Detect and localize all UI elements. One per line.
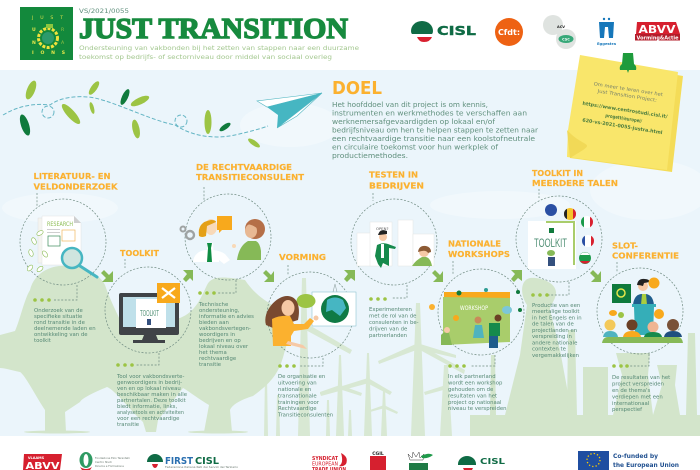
heading: TRANSITIECONSULENT (196, 173, 305, 182)
icon: push pin (620, 53, 636, 73)
description: gehouden om de (448, 387, 493, 393)
panel: step 1 literature and field research (20, 172, 118, 344)
description: deelnemende laden en (34, 326, 96, 332)
icon: consultant woman (237, 219, 265, 260)
description: biedt informatie, links, (117, 404, 177, 410)
dashed flight path (3, 97, 268, 137)
dashed circle (597, 262, 683, 366)
icon: toolkit poster (528, 221, 576, 269)
icon: man in green jacket (375, 230, 396, 268)
icon: audience (602, 319, 683, 343)
text: Doel description: en circulaire toekomst voor hun werkplek of (332, 142, 498, 152)
description: perspectief (612, 407, 642, 413)
description: bieden aan (199, 320, 229, 326)
logo: Fondazione Ezio Tarantelli: Fondazione Ezio Tarantelli (95, 456, 130, 460)
heading: VORMING (279, 253, 326, 262)
text: Doel description: instrumenten en werkmethodes te verschaffen aan (332, 108, 527, 118)
icon: Belgian flag (564, 208, 576, 220)
subtitle: toekomst op bedrijfs- of sectorniveau door middel van sociaal overleg (79, 53, 332, 61)
heading: VELDONDERZOEK (34, 182, 118, 192)
icon: speaker at podium (609, 278, 664, 335)
sticky note text: https://www.centrostudi.cisl.it/ (582, 101, 668, 120)
three dots (531, 293, 549, 297)
dashed circle (516, 189, 602, 295)
description: vergemakkelijken (532, 353, 579, 359)
background clouds (2, 103, 700, 223)
description: De resultaten van het (612, 375, 670, 381)
heading: Doel: DOEL (332, 78, 382, 99)
logo: Vlaams ABVV: VLAAMS (28, 456, 45, 460)
icon: office building (357, 220, 434, 266)
description: ven en op lokaal niveau (117, 386, 181, 392)
heading: LITERATUUR- EN (34, 172, 110, 181)
logo: Just Transition project: R (61, 27, 65, 33)
heading: SLOT- (612, 242, 638, 250)
description: project verspreiden (612, 382, 664, 388)
dashed circle (185, 187, 271, 293)
logo: ACV CSC (543, 15, 576, 49)
description: trainingen voor (278, 400, 320, 406)
logo: Co-funded by the European Union: the European Union (613, 461, 679, 469)
text: Doel description: een rechtvaardige transitie naar een koolstofneutrale (332, 134, 536, 143)
panel: step 2 toolkit (105, 249, 191, 428)
icon: toolkit poster: TOOLKIT (534, 236, 567, 250)
icon: research document with magnifier (26, 216, 97, 277)
logo: ABVV Vorming & Actie: ABVV (638, 24, 676, 36)
description: Experimenteren (369, 307, 412, 313)
description: bedrijven en op (199, 338, 241, 344)
description: informatie en advies (199, 314, 254, 320)
description: meertalige toolkit (532, 309, 580, 315)
sticky note (567, 53, 683, 172)
description: Technische (198, 302, 228, 308)
description: en de thema's (612, 388, 650, 394)
description: uitvoering van (278, 380, 317, 386)
description: contexten te (532, 346, 566, 352)
description: andere nationale (532, 340, 577, 346)
text: Doel description: productiemethodes. (332, 151, 408, 160)
description: rond transitie in de (34, 320, 85, 326)
logo: First CISL (147, 454, 238, 469)
sticky note text: progetti/europei/ (605, 113, 643, 125)
project code: VS/2021/0055 (79, 7, 129, 15)
description: Tool voor vakbondsverte- (116, 374, 184, 380)
heading: WORKSHOPS (448, 250, 510, 259)
background: wind turbines (264, 278, 465, 436)
heading: DE RECHTVAARDIGE (196, 163, 292, 172)
three dots (198, 291, 216, 295)
logo: CGIL (370, 451, 386, 470)
three dots (612, 364, 629, 368)
text: Doel description: Het hoofddoel van dit project is om kennis, (332, 100, 488, 109)
description: analysetools en activiteiten (117, 410, 184, 416)
heading: TOOLKIT IN (532, 169, 583, 178)
text: Doel description: bedrijfsniveau om hen te helpen stappen te zetten naar (332, 126, 538, 134)
heading: NATIONALE (448, 240, 501, 248)
background band (0, 70, 700, 436)
description: de talen van de (532, 322, 574, 328)
heading: MEERDERE TALEN (532, 179, 618, 188)
description: De organisatie en (278, 374, 325, 380)
description: genwoordigers in bedrij- (117, 380, 182, 386)
logo: Just Transition project: JUST (31, 15, 63, 21)
sticky note text: Just Transition Project: (596, 88, 658, 104)
logo: ACV CSC: ACV (557, 25, 565, 29)
description: Rechtvaardige (278, 406, 317, 412)
description: nationale en (278, 387, 311, 393)
description: internationaal (612, 401, 649, 407)
logo: Just Transition project: U (32, 27, 36, 33)
logo: green flower union (408, 452, 433, 470)
three dots (33, 298, 51, 302)
description: in het Engels en in (532, 316, 582, 322)
description: ontwikkeling van de (34, 332, 88, 338)
icon: gears (180, 226, 194, 239)
logo: European Trade Union (312, 453, 347, 470)
logo: Just Transition project: N (32, 40, 36, 46)
logo: CISL small: CISL (480, 457, 505, 466)
logo: ABVV Vorming & Actie (635, 22, 680, 41)
logo: CFDT: Cfdt: (498, 28, 520, 37)
icon: presenter woman (265, 296, 318, 349)
description: In elk partnerland (448, 374, 496, 380)
logo: Co-funded by the European Union: Co-funded by (613, 452, 659, 460)
heading: BEDRIJVEN (369, 182, 424, 190)
icon: monitor with toolkit (119, 283, 180, 343)
icon: speech bubble (217, 216, 232, 233)
logo: CISL small (458, 456, 505, 470)
icon: consultant man (193, 219, 236, 264)
three dots (278, 364, 296, 368)
logo: ABVV Vorming & Actie: Vorming&Actie (636, 35, 679, 41)
three dots (448, 364, 466, 368)
panel: step 3 transition consultant (180, 163, 305, 368)
logo: European Trade Union: EUROPEAN (312, 462, 338, 468)
description: partnertalen. Deze toolkit (117, 398, 186, 404)
logo: ACV CSC: CSC (562, 38, 570, 42)
logo: First CISL: FIRST (165, 456, 193, 467)
heading: CONFERENTIE (612, 252, 679, 260)
description: Onderzoek van de (34, 308, 83, 314)
logo: European Trade Union: SYNDICAT (312, 456, 338, 462)
description: met de rol van de (369, 314, 416, 320)
logo: CISL (411, 21, 476, 42)
description: Productie van een (532, 303, 580, 309)
panel: step 8 final conference (597, 242, 683, 413)
sticky note text: Om meer te leren over het (593, 81, 663, 98)
three dots (369, 297, 387, 301)
description: Transitieconsulenten (277, 412, 333, 418)
dashed circle (351, 193, 437, 298)
description: drijven van de (369, 326, 407, 332)
description: wordt een workshop (448, 380, 503, 386)
description: partnerlanden (369, 333, 407, 339)
description: transitie (117, 422, 139, 428)
description: resultaten van het (448, 394, 497, 400)
icon: workshop board (429, 288, 522, 348)
description: vakbondsvertegen- (199, 326, 251, 332)
logo: Fondazione Ezio Tarantelli (80, 452, 130, 470)
logo: Just Transition project: IONS (32, 50, 65, 56)
description: lokaal niveau over (199, 344, 249, 350)
panel: step 6 national workshops (429, 240, 524, 412)
description: woordigers in (199, 332, 235, 338)
icon: woman at desk (412, 246, 432, 266)
logo: CGIL: CGIL (372, 451, 384, 457)
background: tree silhouettes (0, 266, 700, 436)
icon: workshop board: WORKSHOP (460, 304, 488, 312)
description: voor een rechtvaardige (117, 416, 179, 422)
logo: Just Transition project (20, 7, 73, 60)
icon: monitor with toolkit: TOOLKIT (140, 309, 159, 318)
logo: Just Transition project: A (61, 40, 65, 46)
description: rechtvaardige (199, 356, 236, 362)
icon: Italian flag (581, 216, 593, 228)
text: Doel description: werknemersafgevaardigden op lokaal en/of (332, 117, 495, 126)
logo: figures (597, 18, 616, 46)
logo: CISL: CISL (437, 24, 476, 38)
description: verdiepen met een (612, 394, 663, 400)
description: consulenten in be- (369, 320, 419, 326)
panel: step 5 testing in companies (351, 170, 437, 339)
dashed circle (105, 259, 191, 365)
logo: figures: Eggestra (597, 41, 616, 46)
logo: Co-funded by the European Union (578, 451, 679, 470)
description: project op nationaal (448, 400, 502, 406)
arrows between steps (101, 270, 601, 282)
logo: First CISL: Federazione Italiana Reti dei Servizi del Terziario (165, 465, 238, 469)
heading: TOOLKIT (120, 249, 160, 258)
sticky note text: 620-vs-2021-0055-justra.html (582, 117, 663, 136)
icon: research document with magnifier: RESEARCH (47, 221, 73, 228)
description: ondersteuning, (199, 308, 240, 314)
logo: Fondazione Ezio Tarantelli: Ricerca e Formazione (95, 464, 124, 468)
description: het thema (199, 350, 227, 356)
logo: First CISL: CISL (195, 456, 220, 467)
icon: EU flag (545, 204, 557, 216)
dashed circle (20, 193, 106, 300)
logo: Vlaams ABVV (23, 454, 62, 470)
description: specifieke situatie (34, 314, 82, 320)
panel: step 4 training (265, 253, 356, 418)
dashed circle (267, 265, 353, 366)
sticky note text (579, 80, 671, 137)
dashed circle (438, 261, 524, 366)
logo: CFDT (495, 18, 523, 46)
icon: French flag (582, 235, 594, 247)
icon: Bulgarian flag (579, 252, 591, 264)
description: niveau te verspreiden (448, 406, 507, 412)
description: beschikbaar maken in alle (117, 392, 187, 398)
heading: TESTEN IN (369, 170, 418, 180)
three dots (116, 363, 134, 367)
subtitle: Ondersteuning van vakbonden bij het zetten van stappen naar een duurzame (79, 44, 359, 52)
description: transnationale (278, 394, 317, 400)
panel: step 7 toolkit in multiple languages (516, 169, 618, 359)
description: transitie (199, 362, 221, 368)
icon: presentation board with globe (296, 284, 356, 326)
description: projectlanden en (532, 328, 577, 334)
description: toolkit (34, 338, 51, 344)
logo: Fondazione Ezio Tarantelli: Centro Studi (95, 460, 112, 464)
icon: paper plane (257, 93, 322, 128)
icon: sign: OPEN? (376, 226, 389, 231)
title: JUST TRANSITION (79, 13, 348, 45)
description: verspreiding in (532, 334, 572, 340)
leaves (18, 79, 261, 149)
